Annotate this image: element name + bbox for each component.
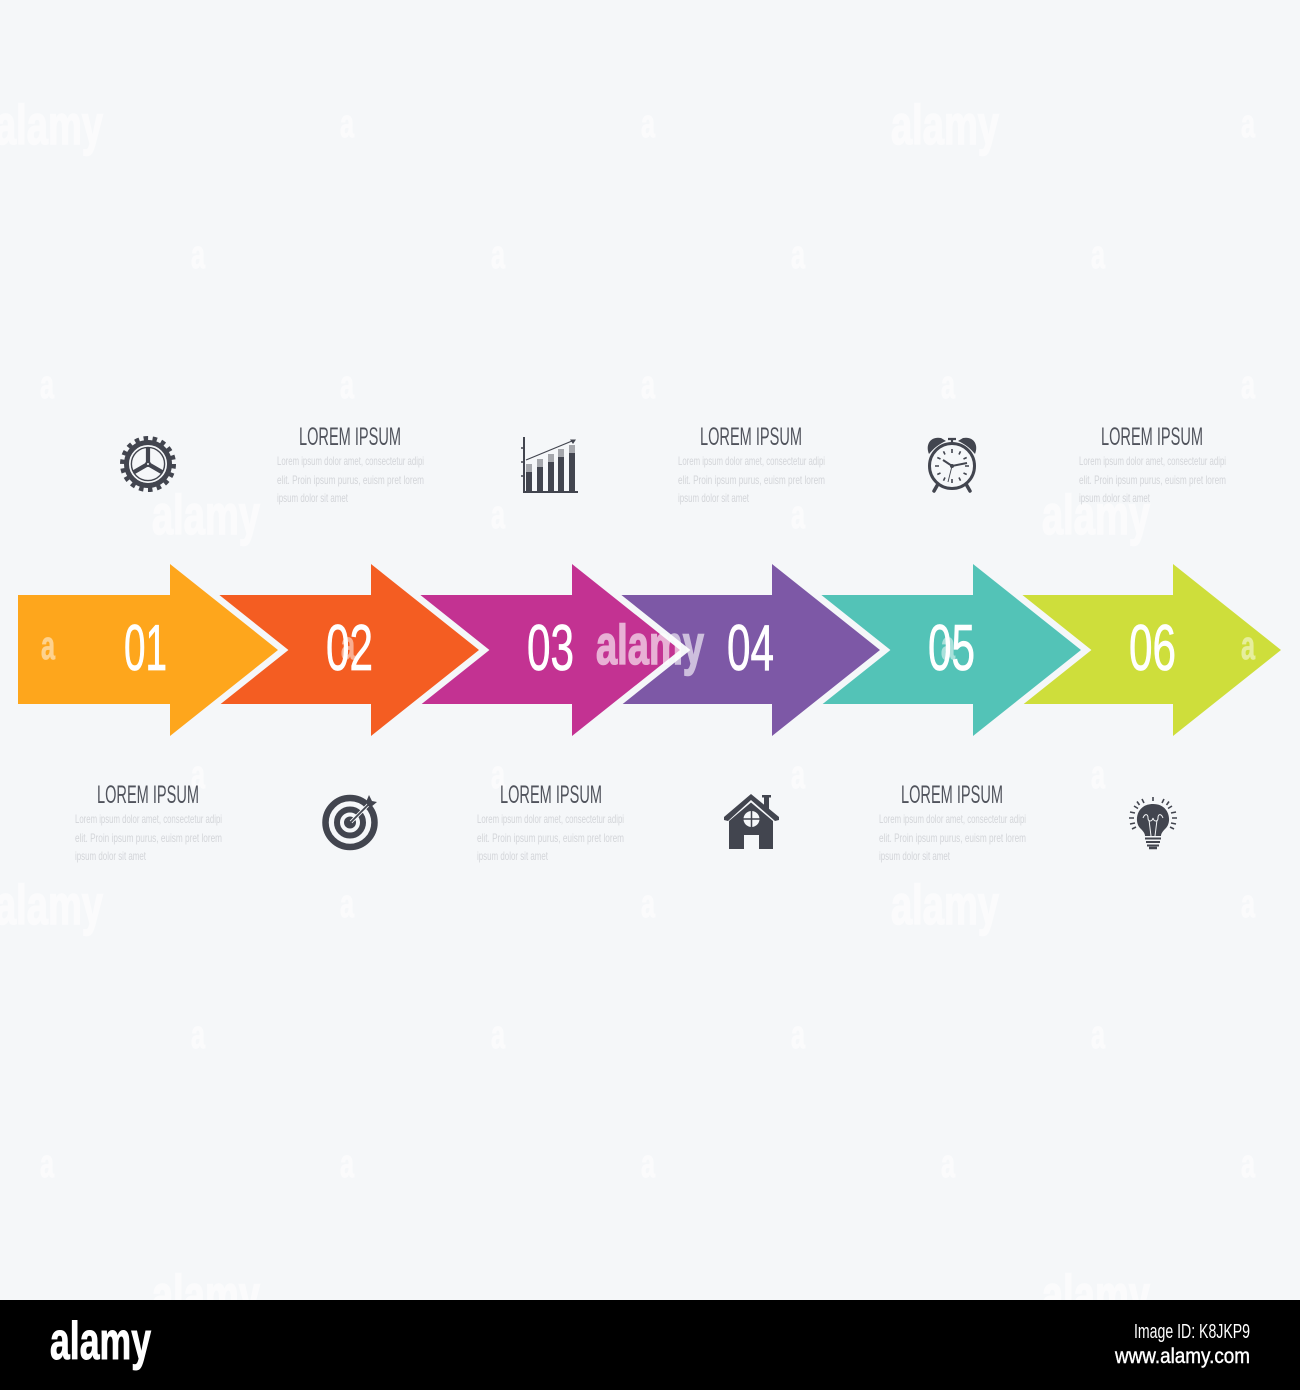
background watermarks: alamy (152, 1263, 260, 1326)
text block: top 2: elit. Proin ipsum purus, euism pret lorem (678, 473, 825, 487)
background watermarks: a (791, 1013, 805, 1057)
arrow timeline (18, 564, 1281, 736)
text block: top 3: ipsum dolor sit amet (1079, 491, 1150, 505)
watermarks on arrows (41, 613, 1255, 676)
step numbers: 03 (527, 611, 574, 684)
background watermarks: a (641, 882, 655, 926)
footer bar (0, 1300, 1300, 1390)
icon: house (724, 794, 779, 849)
text block: top 2: ipsum dolor sit amet (678, 491, 749, 505)
background watermarks: a (340, 102, 354, 146)
image id: Image ID: K8JKP9 (1134, 1321, 1250, 1343)
text block: top 2: Lorem ipsum dolor amet, consectetur adipi (678, 454, 825, 468)
text block: top 1: Lorem ipsum dolor amet, consectetur adipi (277, 454, 424, 468)
background watermarks: a (641, 363, 655, 407)
text block: bottom 1: Lorem ipsum dolor amet, consectetur adipi (75, 812, 222, 826)
footer logo: alamy (50, 1312, 151, 1371)
background watermarks: a (191, 753, 205, 797)
watermarks on arrows: a (1241, 624, 1255, 668)
background watermarks: a (40, 1142, 54, 1186)
text block: top 1 (277, 423, 424, 505)
background watermarks: a (791, 233, 805, 277)
website: www.alamy.com (1114, 1345, 1250, 1368)
background watermarks: a (791, 493, 805, 537)
text block: bottom 3: ipsum dolor sit amet (879, 849, 950, 863)
text block: top 3: LOREM IPSUM (1101, 423, 1203, 451)
background watermarks: a (1241, 882, 1255, 926)
step numbers: 06 (1129, 611, 1176, 684)
arrow 5 (810, 564, 1081, 736)
background watermarks: a (1091, 1013, 1105, 1057)
background watermarks: a (1091, 753, 1105, 797)
text block: bottom 3 (879, 781, 1026, 863)
background watermarks: alamy (1042, 1263, 1150, 1326)
text block: bottom 1 (75, 781, 222, 863)
background watermarks: a (491, 753, 505, 797)
background watermarks: a (191, 233, 205, 277)
text block: bottom 2: Lorem ipsum dolor amet, consectetur adipi (477, 812, 624, 826)
step numbers: 05 (928, 611, 975, 684)
background watermarks: a (340, 882, 354, 926)
text block: bottom 3: elit. Proin ipsum purus, euism pret lorem (879, 831, 1026, 845)
step numbers: 04 (727, 611, 774, 684)
text block: top 1: elit. Proin ipsum purus, euism pret lorem (277, 473, 424, 487)
arrow 6 (1010, 564, 1281, 736)
background watermarks: a (191, 1013, 205, 1057)
step numbers (124, 611, 1176, 684)
text block: bottom 2: LOREM IPSUM (500, 781, 602, 809)
arrow 1 (18, 564, 278, 736)
background watermarks: a (791, 753, 805, 797)
watermarks on arrows: alamy (596, 613, 704, 676)
text block: top 3: elit. Proin ipsum purus, euism pret lorem (1079, 473, 1226, 487)
text block: bottom 2 (477, 781, 624, 863)
watermarks on arrows: a (941, 624, 955, 668)
text block: bottom 3: LOREM IPSUM (901, 781, 1003, 809)
icon: light bulb (1129, 797, 1177, 848)
watermarks on arrows: a (341, 624, 355, 668)
background watermarks: a (1241, 1142, 1255, 1186)
arrow 4 (610, 564, 880, 736)
icon: alarm clock (928, 438, 976, 491)
background watermarks: a (1241, 363, 1255, 407)
background watermarks: a (491, 1013, 505, 1057)
text block: bottom 1: ipsum dolor sit amet (75, 849, 146, 863)
text block: bottom 1: LOREM IPSUM (97, 781, 199, 809)
text block: bottom 3: Lorem ipsum dolor amet, consectetur adipi (879, 812, 1026, 826)
step numbers: 02 (326, 611, 373, 684)
background watermarks: alamy (152, 483, 260, 546)
background watermarks: a (491, 493, 505, 537)
text block: top 3 (1079, 423, 1226, 505)
background watermarks: a (491, 233, 505, 277)
background watermarks: alamy (891, 873, 999, 936)
icon: target (326, 795, 377, 847)
text block: bottom 1: elit. Proin ipsum purus, euism pret lorem (75, 831, 222, 845)
text block: bottom 2: elit. Proin ipsum purus, euism pret lorem (477, 831, 624, 845)
text block: top 1: ipsum dolor sit amet (277, 491, 348, 505)
text block: bottom 2: ipsum dolor sit amet (477, 849, 548, 863)
watermarks on arrows: a (41, 624, 55, 668)
background watermarks: a (941, 1142, 955, 1186)
arrow 3 (410, 564, 680, 736)
arrow 2 (209, 564, 479, 736)
background watermarks: a (340, 363, 354, 407)
text block: top 1: LOREM IPSUM (299, 423, 401, 451)
background watermarks: a (340, 1142, 354, 1186)
background watermarks: alamy (891, 93, 999, 156)
background watermarks: a (40, 363, 54, 407)
text block: top 3: Lorem ipsum dolor amet, consectetur adipi (1079, 454, 1226, 468)
background watermarks: alamy (1042, 483, 1150, 546)
background watermarks: a (941, 363, 955, 407)
background watermarks: a (641, 1142, 655, 1186)
step numbers: 01 (124, 611, 167, 684)
background watermarks: a (1241, 102, 1255, 146)
icon: gear (123, 439, 173, 489)
text block: top 2: LOREM IPSUM (700, 423, 802, 451)
text block: top 2 (678, 423, 825, 505)
background watermarks: a (1091, 233, 1105, 277)
icon: bar chart (521, 437, 578, 492)
background watermarks: a (641, 102, 655, 146)
